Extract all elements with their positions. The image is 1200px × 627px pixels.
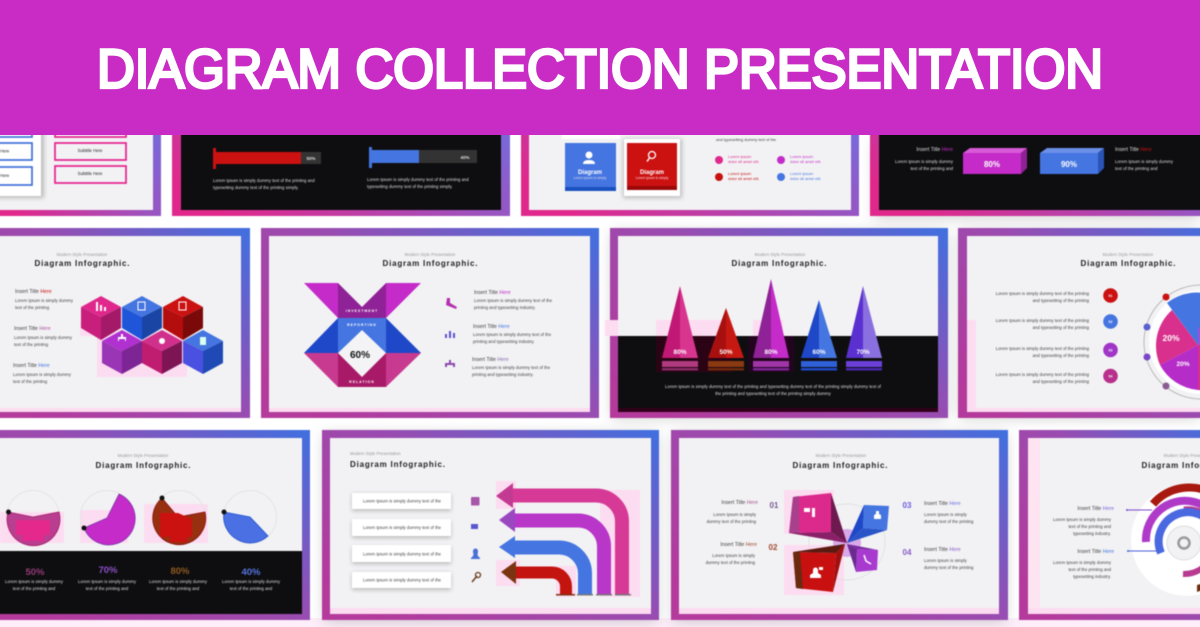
gauge captions: Lorem Ipsum is simply dummy bbox=[149, 579, 208, 584]
numbered list: dolor sit amet elit. bbox=[728, 176, 759, 181]
pie list text: Lorem Ipsum is simply dummy text of the printing bbox=[996, 346, 1090, 351]
arrow: blue bbox=[499, 536, 593, 596]
numbered circles: 03 bbox=[1109, 348, 1112, 352]
arcs text: Lorem Ipsum is simply dummy bbox=[1053, 560, 1112, 565]
slide: isometric cubes: Modern Style Presentation bbox=[57, 252, 108, 257]
slide: circular gauges: Modern Style Presentation bbox=[118, 453, 169, 458]
slide: X diagram: Modern Style Presentation bbox=[405, 252, 456, 257]
concentric arc chart bbox=[1126, 484, 1200, 596]
gauge captions: Lorem Ipsum is simply dummy bbox=[5, 579, 64, 584]
X diagram text: Insert Title Here bbox=[473, 324, 510, 330]
blue progress bar bbox=[369, 147, 477, 168]
pie list text: Lorem Ipsum is simply dummy text of the printing bbox=[996, 291, 1090, 296]
petal tint blocks bbox=[784, 490, 844, 595]
pie list text bbox=[996, 291, 1090, 384]
cone: pink 80%: 80% bbox=[673, 349, 687, 356]
slide: outlined subtitle boxes: Here bbox=[0, 173, 10, 178]
lower page tint bbox=[0, 618, 1200, 627]
gauge captions: text of the printing and bbox=[157, 586, 200, 591]
petal text: dummy text of the printing bbox=[924, 519, 974, 524]
petal text: Lorem Ipsum is simply bbox=[713, 512, 757, 517]
gauge captions: text of the printing and bbox=[230, 586, 273, 591]
text boxes: Lorem Ipsum is simply dummy text of the bbox=[363, 498, 442, 504]
blue card: Lorem Ipsum is simply bbox=[574, 176, 607, 180]
petal text: dummy text of the printing bbox=[924, 565, 974, 570]
text boxes bbox=[352, 493, 451, 590]
petal text: Insert Title Here bbox=[721, 500, 758, 506]
slide: outlined subtitle boxes: Subtitle Here bbox=[78, 148, 103, 153]
slide: diagram cards: and typesetting dummy text of the bbox=[716, 137, 777, 142]
cone: purple 80% bbox=[753, 279, 789, 370]
X diagram text: Lorem Ipsum is simply dummy text of the bbox=[473, 332, 552, 337]
purple 3D box: 80% bbox=[984, 160, 1000, 169]
gauge captions bbox=[5, 579, 281, 591]
X diagram text: Insert Title Here bbox=[472, 357, 509, 363]
arcs text: text of the printing and bbox=[1068, 567, 1112, 572]
X diagram text bbox=[472, 290, 553, 377]
slide: 3D boxes on black: text of the printing and bbox=[910, 166, 954, 171]
X diagram text: printing and typesetting industry. bbox=[474, 305, 536, 310]
slide: cones: Diagram Infographic. bbox=[732, 259, 826, 268]
slides collection bbox=[0, 120, 1200, 620]
slide: pie chart: Diagram Infographic. bbox=[1080, 259, 1176, 268]
petal text: Insert Title Here bbox=[924, 547, 961, 553]
slide: 3D petals: Modern Style Presentation bbox=[816, 453, 867, 458]
numbered list: dolor sit amet elit. bbox=[790, 159, 821, 164]
petal numbers: 03 bbox=[903, 501, 912, 510]
slide: 3D boxes on black: Insert Title Here bbox=[916, 147, 953, 153]
numbered list: Lorem ipsum bbox=[728, 171, 752, 176]
cubes text: text of the printing bbox=[15, 305, 50, 310]
slide: diagram cards bbox=[521, 120, 859, 216]
gauge: 70% bbox=[80, 490, 135, 545]
text boxes: Lorem Ipsum is simply dummy text of the bbox=[363, 578, 442, 582]
pie chart bbox=[1144, 285, 1200, 399]
slide: cones bbox=[605, 228, 948, 418]
slide: cones: Modern Style Presentation bbox=[755, 252, 806, 257]
slide: progress bars on black: Lorem Ipsum is simply dummy text of the printing and bbox=[367, 177, 469, 182]
gauge captions: text of the printing and bbox=[86, 586, 129, 591]
cube tint blocks bbox=[80, 322, 187, 377]
slide: circular gauges bbox=[0, 430, 310, 620]
cubes text: Lorem Ipsum is simply dummy bbox=[13, 372, 72, 377]
slide: arrows: Modern Style Presentation bbox=[350, 451, 401, 456]
pie list text: and typesetting of the printing bbox=[1033, 353, 1090, 358]
slide: progress bars on black: Lorem Ipsum is simply dummy text of the printing and bbox=[213, 178, 315, 183]
slide: outlined subtitle boxes bbox=[0, 120, 161, 216]
X diagram text: printing and typesetting industry. bbox=[473, 339, 535, 344]
numbered list: dolor sit amet elit. bbox=[790, 176, 821, 181]
text boxes: Lorem Ipsum is simply dummy text of the bbox=[363, 525, 442, 530]
gauge: 40% bbox=[222, 490, 276, 544]
cubes text: Insert Title Here bbox=[13, 363, 50, 369]
gauge captions: text of the printing and bbox=[13, 586, 56, 591]
icons bbox=[471, 497, 480, 582]
X diagram text: Lorem Ipsum is simply dummy text of the bbox=[474, 298, 553, 303]
blue card: Diagram bbox=[578, 170, 602, 176]
X shape chart: REPORTING bbox=[347, 323, 377, 327]
slide: progress bars on black: typesetting dummy text of the printing simply. bbox=[367, 184, 453, 189]
slide: X diagram: Diagram Infographic. bbox=[382, 259, 478, 268]
slide: circular gauges: Diagram Infographic. bbox=[96, 461, 190, 470]
slide: X diagram bbox=[261, 228, 599, 418]
gauge labels: 70% bbox=[98, 565, 118, 576]
cone: violet 70% bbox=[846, 286, 882, 370]
pie list text: and typesetting of the printing bbox=[1033, 298, 1090, 303]
red card: Diagram bbox=[640, 170, 664, 176]
slide: isometric cubes: Diagram Infographic. bbox=[34, 259, 130, 268]
red progress bar: 50% bbox=[306, 156, 316, 161]
petal numbers: 04 bbox=[903, 548, 912, 557]
numbered list: Lorem ipsum bbox=[728, 154, 752, 159]
petal numbers: 01 bbox=[770, 501, 779, 510]
title: DIAGRAM COLLECTION PRESENTATION bbox=[97, 38, 1103, 100]
petal text: Lorem Ipsum is simply bbox=[924, 512, 968, 517]
pie chart: 20% bbox=[1176, 361, 1190, 368]
gauge: 50% bbox=[6, 490, 60, 546]
cubes text: text of the printing bbox=[14, 342, 49, 347]
cone: blue 60% bbox=[801, 300, 837, 370]
petal text: dummy text of the printing bbox=[707, 519, 757, 524]
petal numbers: 02 bbox=[769, 543, 778, 552]
numbered list: Lorem ipsum bbox=[790, 171, 814, 176]
cube: red bbox=[163, 296, 203, 340]
cone: blue 60%: 60% bbox=[812, 349, 826, 356]
text boxes: Lorem Ipsum is simply dummy text of the bbox=[363, 552, 442, 556]
arcs text: typesetting industry. bbox=[1073, 531, 1111, 536]
cube: purple bbox=[102, 330, 142, 374]
petal text: Lorem Ipsum is simply bbox=[712, 553, 756, 558]
slide: 3D boxes on black: Insert Title Here bbox=[1115, 147, 1152, 153]
red progress bar bbox=[213, 148, 321, 169]
icon: chart bbox=[445, 331, 455, 338]
X shape chart: INVESTMENT bbox=[346, 309, 378, 313]
X shape chart bbox=[304, 283, 421, 387]
cubes text bbox=[13, 289, 74, 384]
slide: arrows bbox=[322, 430, 659, 620]
icon: network bbox=[445, 360, 455, 367]
gauge captions: Lorem Ipsum is simply dummy bbox=[222, 579, 281, 584]
X shape chart: 60% bbox=[350, 350, 370, 361]
purple 3D box bbox=[963, 148, 1027, 174]
cube: blue violet bbox=[183, 330, 223, 374]
slide: 3D boxes on black: Lorem Ipsum is simply dummy bbox=[1115, 159, 1174, 164]
petal text: dummy text of the printing bbox=[706, 560, 756, 565]
slide: outlined subtitle boxes: Subtitle Here bbox=[78, 171, 103, 176]
cone: red 50%: 50% bbox=[719, 349, 733, 356]
slide: 3D boxes on black: Lorem Ipsum is simply dummy bbox=[895, 159, 954, 164]
X diagram text: printing and typesetting industry. bbox=[472, 372, 534, 377]
cube: pink bbox=[142, 330, 182, 374]
cubes text: Insert Title Here bbox=[15, 289, 52, 295]
petal text: Insert Title Here bbox=[924, 501, 961, 507]
numbered circles bbox=[1103, 288, 1118, 383]
blue 3D box bbox=[1040, 148, 1104, 174]
slide shadows bbox=[324, 140, 1200, 622]
arcs text: Insert Title Here bbox=[1077, 506, 1114, 512]
pie list text: Lorem Ipsum is simply dummy text of the printing bbox=[996, 372, 1090, 377]
cubes text: text of the printing bbox=[13, 379, 48, 384]
gauge labels bbox=[25, 565, 261, 578]
arrow: pink bbox=[496, 483, 631, 596]
cone: pink 80% bbox=[662, 286, 698, 370]
arcs text: Insert Title Here bbox=[1077, 549, 1114, 555]
cone: purple 80%: 80% bbox=[764, 349, 778, 356]
gauge captions: Lorem Ipsum is simply dummy bbox=[78, 579, 137, 584]
numbered circles: 01 bbox=[1109, 294, 1112, 298]
icon: hand bbox=[446, 298, 457, 309]
cube: pink chart bbox=[81, 296, 121, 340]
cone: red 50% bbox=[708, 308, 744, 370]
cone tint blocks bbox=[605, 320, 938, 412]
slide: pie chart: Modern Style Presentation bbox=[1103, 252, 1154, 257]
petal text: Insert Title Here bbox=[720, 542, 757, 548]
blue card bbox=[565, 143, 616, 191]
arcs text: typesetting industry. bbox=[1073, 574, 1111, 579]
pie list text: and typesetting of the printing bbox=[1033, 379, 1090, 384]
red card bbox=[623, 139, 682, 198]
slide: isometric cubes bbox=[0, 228, 250, 418]
header banner bbox=[0, 0, 1200, 135]
slide: outlined subtitle boxes: Here bbox=[0, 148, 10, 154]
cone: violet 70%: 70% bbox=[856, 349, 870, 356]
numbered circles: 02 bbox=[1109, 320, 1112, 324]
petal text: Lorem Ipsum is simply bbox=[924, 558, 968, 563]
cubes text: Insert Title Here bbox=[14, 326, 51, 332]
gauge labels: 50% bbox=[25, 567, 45, 578]
slide: arrows: Diagram Infographic. bbox=[350, 460, 445, 469]
blue progress bar: 40% bbox=[460, 155, 470, 160]
slide: progress bars on black: typesetting dummy text of the printing simply. bbox=[213, 185, 299, 190]
cubes text: Lorem Ipsum is simply dummy bbox=[15, 298, 74, 303]
X shape chart: RELATION bbox=[349, 380, 375, 384]
arcs text: Lorem Ipsum is simply dummy bbox=[1053, 517, 1112, 522]
numbered circles: 04 bbox=[1109, 374, 1112, 378]
arrow: red bbox=[501, 561, 575, 596]
pie list text: Lorem Ipsum is simply dummy text of the printing bbox=[996, 318, 1090, 323]
petal text bbox=[706, 500, 974, 570]
slide: 3D boxes on black: text of the printing and bbox=[1115, 166, 1158, 171]
gauge: 80% bbox=[152, 490, 206, 545]
X diagram text: Insert Title Here bbox=[474, 290, 511, 296]
X diagram text: Lorem Ipsum is simply dummy text of the bbox=[472, 365, 551, 370]
cube: blue bbox=[122, 296, 162, 340]
pie list text: and typesetting of the printing bbox=[1033, 325, 1090, 330]
blue 3D box: 90% bbox=[1061, 160, 1077, 169]
slide: cones: Lorem Ipsum is simply dummy text of the printing and typesetting dummy text of the printing simply dummy text of bbox=[665, 384, 882, 389]
arrow: purple bbox=[499, 508, 612, 596]
petal diagram bbox=[789, 493, 889, 592]
slide: cones: the printing and typesetting text of the printing simply dummy bbox=[715, 391, 832, 396]
gauge tint blocks bbox=[0, 504, 208, 543]
numbered list bbox=[715, 154, 821, 181]
gauge labels: 40% bbox=[241, 567, 261, 578]
slide: pie chart bbox=[958, 228, 1200, 418]
red card: Lorem Ipsum is simply bbox=[636, 176, 669, 180]
slide: 3D petals: Diagram Infographic. bbox=[792, 461, 888, 470]
petal numbers bbox=[769, 501, 912, 557]
arcs text bbox=[1053, 506, 1114, 579]
numbered list: Lorem ipsum bbox=[790, 154, 814, 159]
arcs text: text of the printing and bbox=[1068, 524, 1112, 529]
gauge labels: 80% bbox=[170, 566, 190, 577]
slide: concentric arcs bbox=[1019, 430, 1200, 620]
cubes text: Lorem Ipsum is simply dummy bbox=[14, 335, 73, 340]
numbered list: dolor sit amet elit. bbox=[728, 159, 759, 164]
pie chart: 20% bbox=[1162, 333, 1180, 343]
slide: 3D boxes on black bbox=[870, 120, 1200, 216]
slide: progress bars on black bbox=[172, 120, 510, 216]
slide: 3D petals bbox=[671, 430, 1008, 620]
arrow tint blocks bbox=[496, 481, 640, 597]
